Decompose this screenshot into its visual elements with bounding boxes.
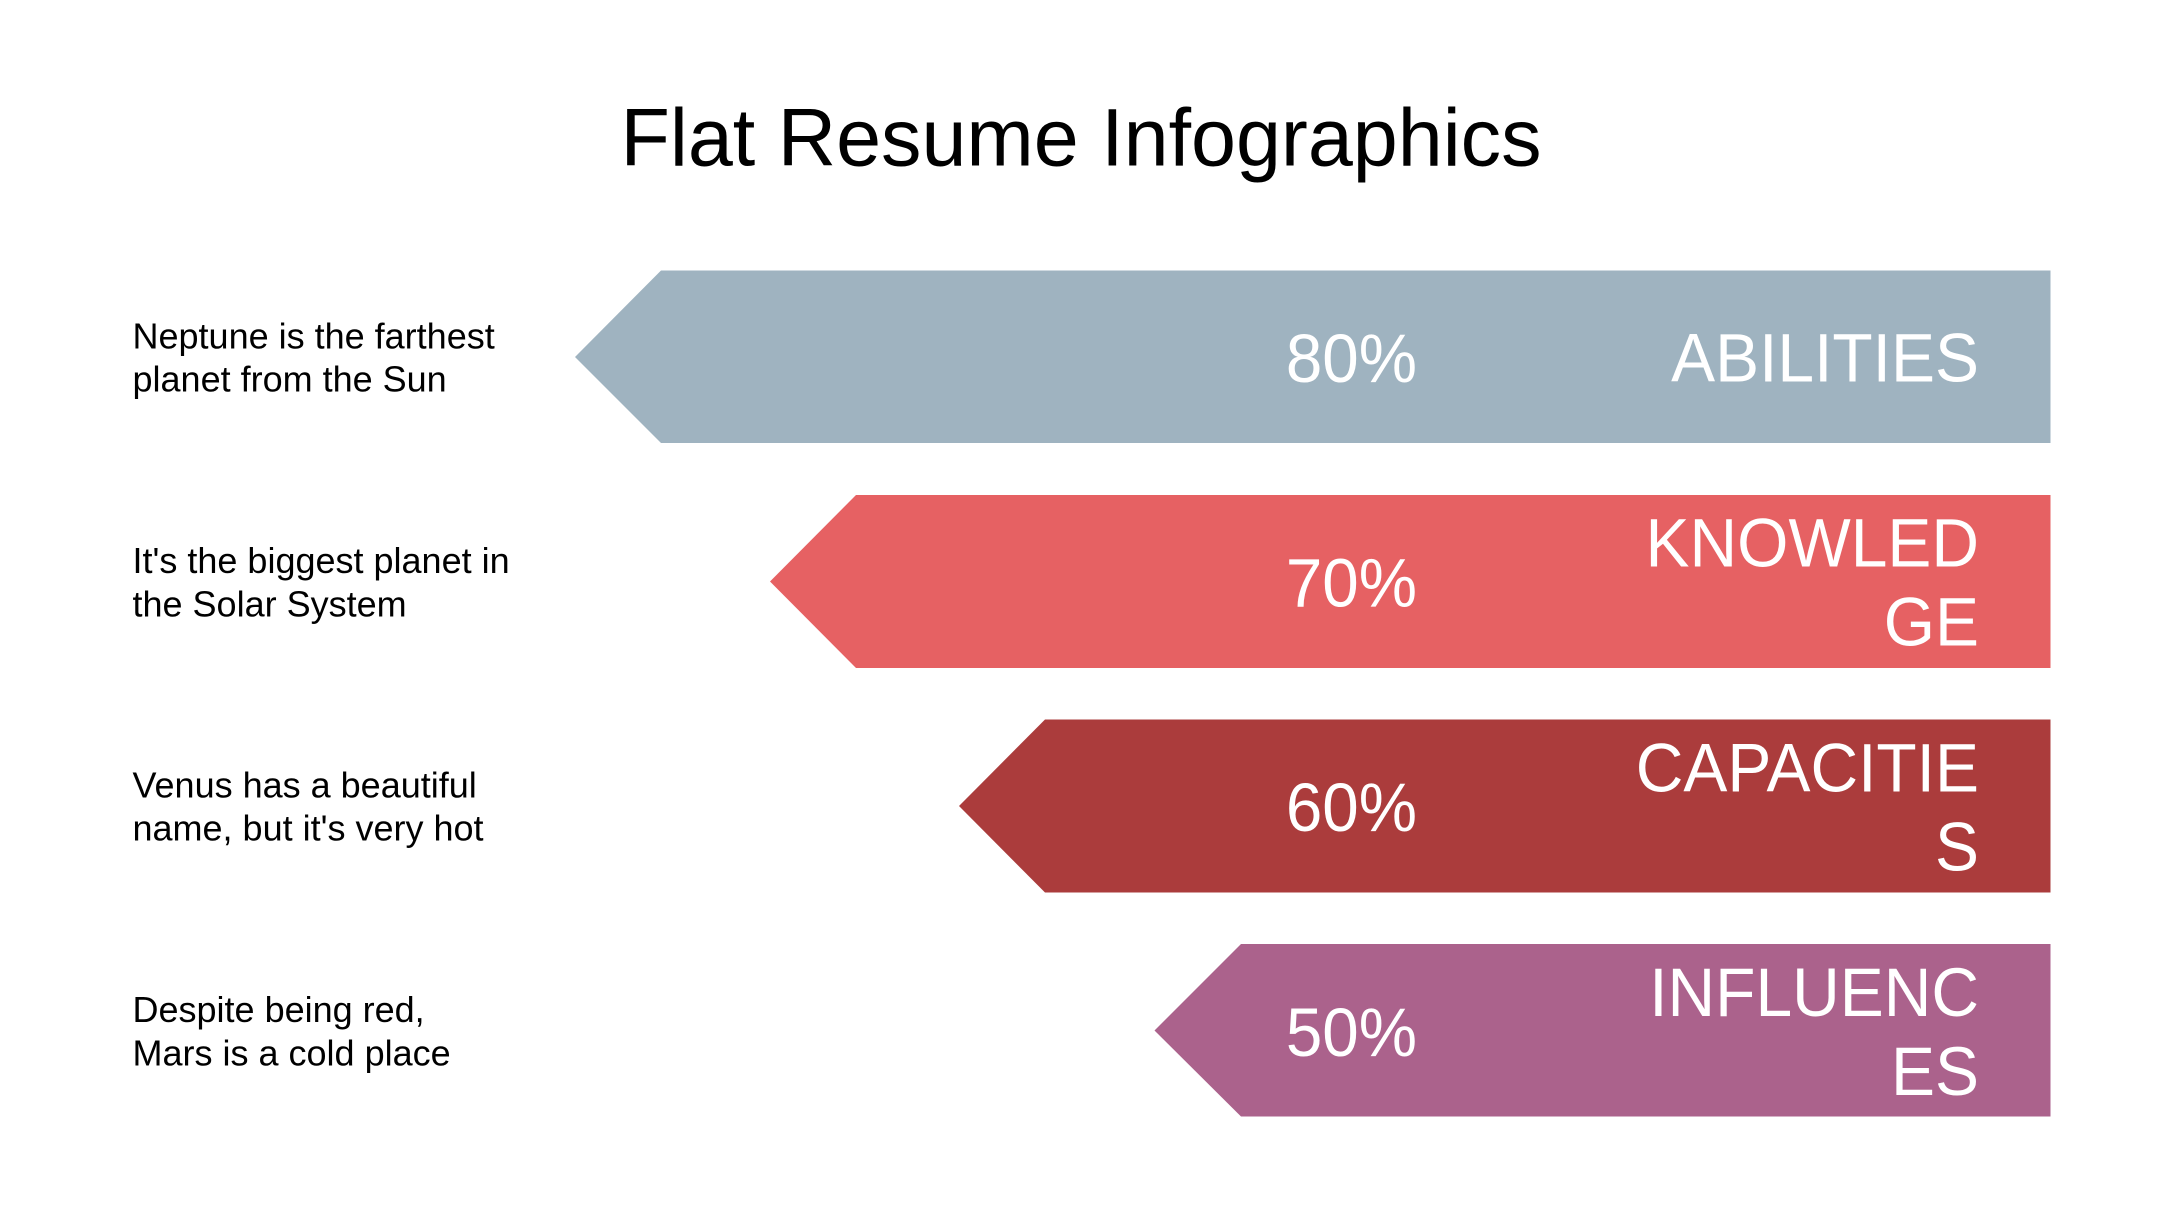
label: abilities: ABILITIES — [1671, 320, 1979, 397]
arrow bar: capacities 60% — [959, 720, 2050, 892]
description: capacities: Venus has a beautiful — [132, 764, 477, 806]
description: influences: Despite being red, — [132, 989, 425, 1030]
arrow bar: knowledge 70% — [770, 495, 2050, 668]
percentage: 80%: 80% — [1286, 320, 1417, 397]
percentage: 70%: 70% — [1286, 545, 1417, 622]
arrow bar: abilities 80% — [575, 270, 2050, 443]
label: influences: ES — [1891, 1034, 1979, 1110]
row: abilities — [132, 270, 2050, 443]
description: knowledge: the Solar System — [132, 584, 407, 624]
row: knowledge — [132, 495, 2050, 668]
percentage: 50%: 50% — [1286, 994, 1417, 1071]
row: capacities — [132, 720, 2050, 892]
description: abilities: planet from the Sun — [132, 358, 447, 400]
label: capacities: S — [1935, 809, 1979, 886]
label: capacities: CAPACITIE — [1636, 730, 1979, 807]
row: influences — [132, 944, 2050, 1116]
percentage: 60%: 60% — [1286, 769, 1417, 846]
description: abilities: Neptune is the farthest — [132, 316, 495, 356]
label: knowledge: KNOWLED — [1646, 505, 1979, 582]
arrow bar: influences 50% — [1154, 944, 2050, 1116]
label: influences: INFLUENC — [1649, 955, 1979, 1031]
description: capacities: name, but it's very hot — [132, 808, 484, 848]
label: knowledge: GE — [1884, 584, 1979, 661]
title: Flat Resume Infographics — [621, 92, 1541, 184]
description: knowledge: It's the biggest planet in — [132, 540, 510, 581]
description: influences: Mars is a cold place — [132, 1032, 451, 1074]
